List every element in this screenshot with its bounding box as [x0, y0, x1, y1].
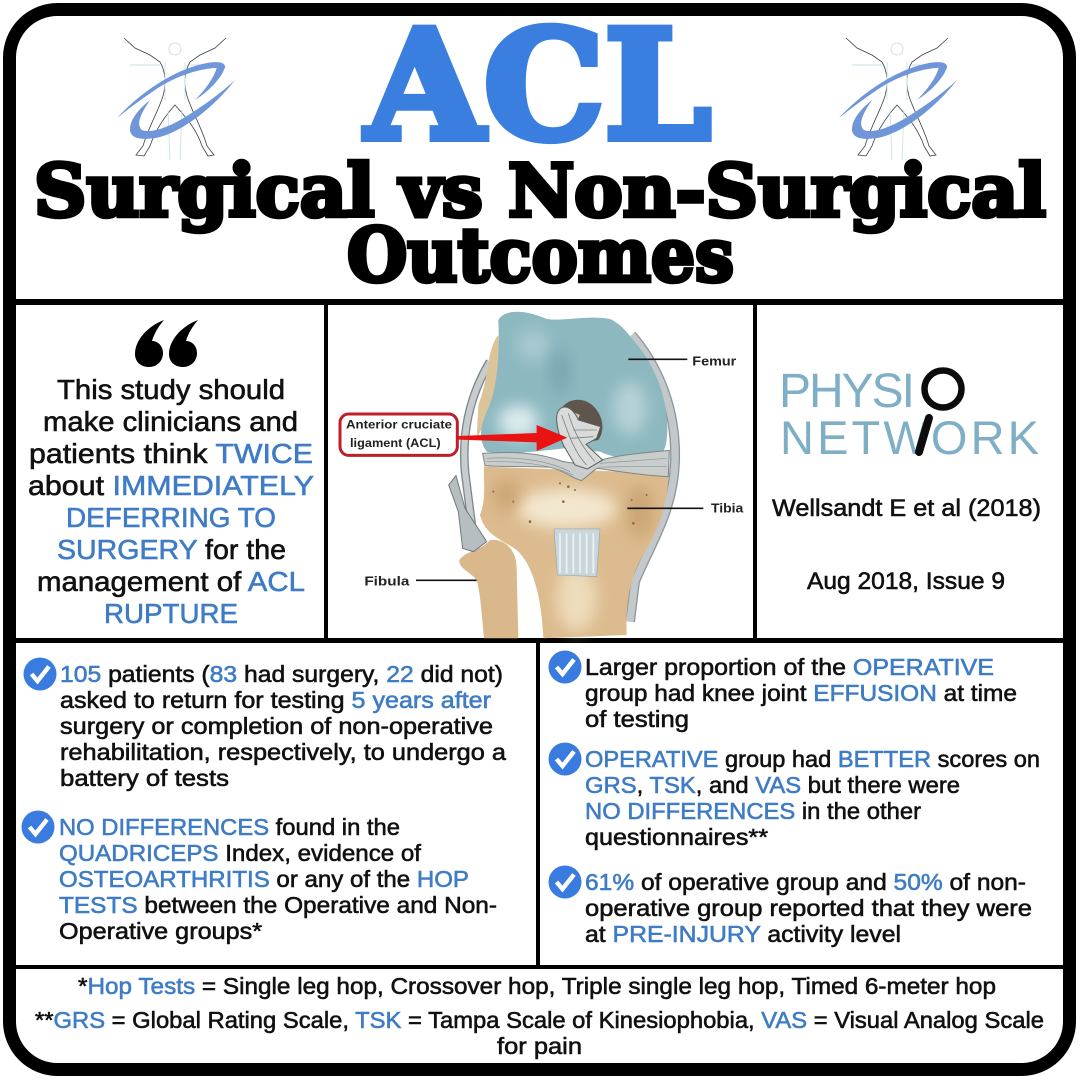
- title: Outcomes: Outcomes: [347, 213, 734, 299]
- footnotes: [35, 973, 1044, 1059]
- icon: check: [22, 810, 54, 844]
- quote text: make clinicians and: [43, 406, 298, 437]
- panel: left findings: [22, 658, 507, 944]
- bullet: scores: questionnaires**: [585, 824, 768, 850]
- citation: Wellsandt E et al (2018): [772, 495, 1041, 522]
- quote text: patients think TWICE: [29, 438, 313, 469]
- lateral ligament: [630, 335, 675, 622]
- patellar tendon remnant: [554, 529, 600, 577]
- bullet: no differences: OSTEOARTHRITIS or any of the HOP: [59, 866, 469, 892]
- label: Tibia: [627, 502, 744, 516]
- bullet: activity level: 61% of operative group and 50% of non-: [585, 869, 1026, 895]
- bullet: effusion: of testing: [585, 706, 689, 732]
- bullet: no differences: NO DIFFERENCES found in the: [59, 814, 400, 840]
- issue date: Aug 2018, Issue 9: [807, 568, 1005, 595]
- bullet: activity level: [585, 869, 1032, 947]
- logo: Physio Network: [779, 365, 1039, 464]
- fibular ligament: [449, 476, 487, 552]
- medial ligament: [464, 362, 490, 550]
- femur: [481, 312, 667, 458]
- logo: Physio Network: NETWORK: [780, 411, 1039, 464]
- bullet: study design: 105 patients (83 had surgery, 22 did not): [60, 661, 503, 687]
- quote text: about IMMEDIATELY: [28, 470, 314, 501]
- label: Tibia: Tibia: [711, 502, 744, 516]
- bullet: effusion: [585, 654, 1017, 732]
- bullet: activity level: at PRE-INJURY activity level: [585, 921, 901, 947]
- bullet: study design: surgery or completion of non-operative: [60, 713, 493, 739]
- fibula: [459, 540, 518, 638]
- quote text: RUPTURE: [104, 598, 238, 629]
- icon: check: [24, 658, 56, 690]
- ACL label box: Anterior cruciate: [346, 417, 452, 431]
- quote text: management of ACL: [37, 566, 305, 597]
- icon: check: [548, 742, 582, 776]
- label: Femur: [628, 354, 736, 368]
- panel dividers: [14, 299, 1066, 969]
- quote text: SURGERY for the: [57, 534, 286, 565]
- label: Fibula: [364, 574, 477, 589]
- bullet: study design: rehabilitation, respectively, to undergo a: [60, 739, 507, 765]
- label: Femur: Femur: [692, 354, 736, 368]
- title: ACL: ACL: [364, 0, 711, 174]
- bullet: study design: [60, 661, 507, 791]
- panel: quote: [28, 320, 314, 629]
- logo: Physio Network: PHYSI: [779, 365, 915, 418]
- footnotes: **GRS = Global Rating Scale, TSK = Tampa Scale of Kinesiophobia, VAS = Visual Analog Scale: [35, 1007, 1044, 1033]
- femur side bone: [477, 335, 503, 438]
- icon: magnifier: [919, 370, 962, 452]
- left logo: [117, 38, 235, 160]
- footnotes: for pain: [497, 1033, 582, 1059]
- bullet: no differences: [59, 814, 497, 944]
- bullet: activity level: operative group reported that they were: [585, 895, 1032, 921]
- bullet: no differences: TESTS between the Operative and Non-: [59, 892, 497, 918]
- quote text: DEFERRING TO: [66, 502, 276, 533]
- quote text: This study should: [57, 374, 285, 405]
- bullet: effusion: Larger proportion of the OPERATIVE: [585, 654, 994, 680]
- ACL label box: [340, 414, 457, 455]
- icon: quotation mark: [135, 320, 198, 367]
- bullet: study design: battery of tests: [60, 765, 229, 791]
- bullet: no differences: QUADRICEPS Index, evidence of: [59, 840, 421, 866]
- meniscus: [483, 450, 669, 481]
- bullet: study design: asked to return for testing 5 years after: [60, 687, 491, 713]
- footnotes: *Hop Tests = Single leg hop, Crossover hop, Triple single leg hop, Timed 6-meter hop: [78, 973, 996, 999]
- bullet: scores: NO DIFFERENCES in the other: [585, 798, 921, 824]
- bullet: scores: [585, 746, 1040, 850]
- bullet: scores: OPERATIVE group had BETTER scores on: [585, 746, 1040, 772]
- title: Surgical vs Non-Surgical: Surgical vs Non-Surgical: [34, 148, 1046, 233]
- bullet: no differences: Operative groups*: [59, 918, 262, 944]
- ACL label box: ligament (ACL): [350, 436, 441, 450]
- icon: check: [548, 866, 582, 898]
- right logo: [839, 38, 957, 160]
- knee anatomy illustration: [340, 312, 744, 638]
- label: Fibula: Fibula: [364, 574, 410, 589]
- bullet: scores: GRS, TSK, and VAS but there were: [585, 772, 960, 798]
- intercondylar notch: [557, 400, 602, 447]
- ACL ligament: [557, 407, 603, 469]
- red arrow: [458, 425, 567, 451]
- tibia: [480, 467, 668, 638]
- panel: right findings: [548, 650, 1040, 947]
- bullet: effusion: group had knee joint EFFUSION at time: [585, 680, 1017, 706]
- icon: check: [548, 650, 582, 684]
- quote text: [28, 374, 314, 629]
